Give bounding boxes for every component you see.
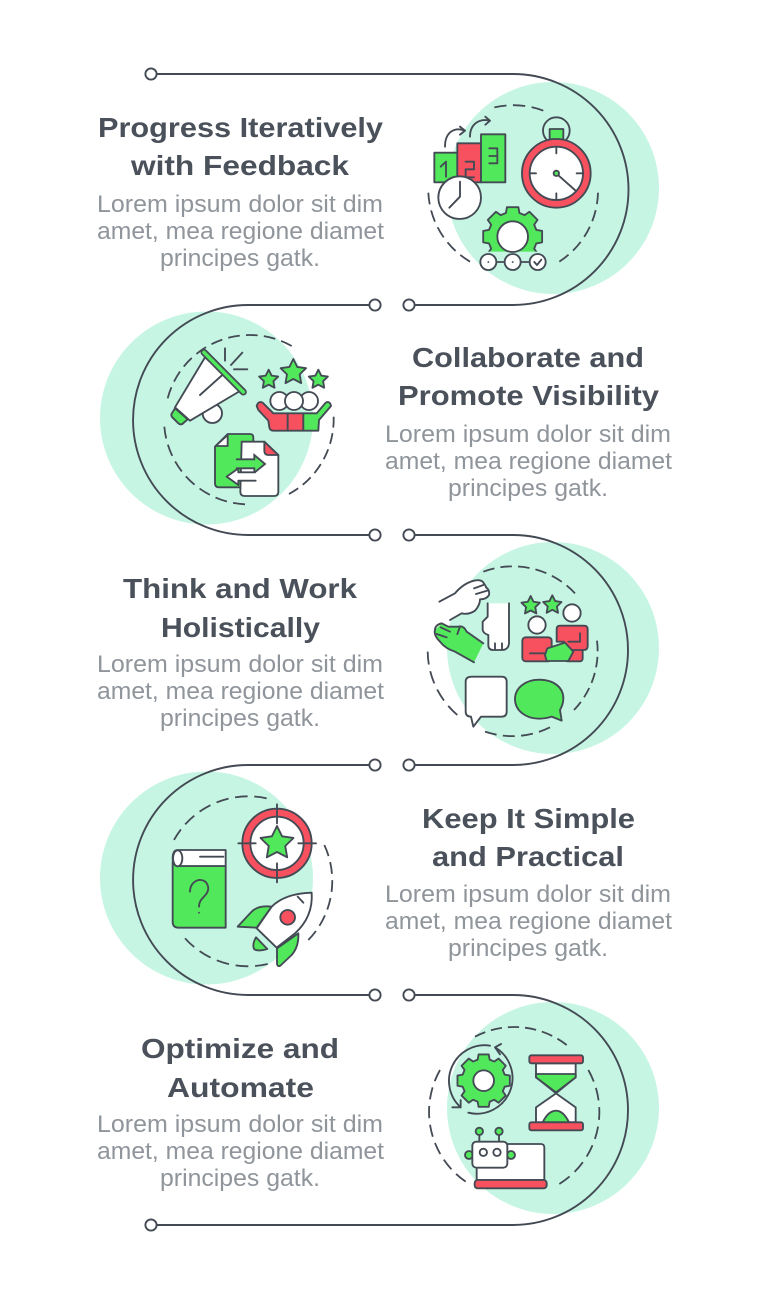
mint circle 3	[447, 542, 659, 754]
icon: megaphone	[171, 348, 247, 424]
heading 4: Keep It Simple	[422, 803, 635, 834]
panel: optimize and automate	[97, 989, 659, 1231]
icons 5	[429, 1027, 599, 1188]
mint circle 4	[100, 772, 313, 984]
body text 3	[97, 651, 384, 732]
body text 5: principes gatk.	[160, 1165, 320, 1192]
heading 3	[123, 573, 357, 643]
icon: document exchange	[215, 434, 278, 496]
mint circle 2	[100, 312, 313, 524]
heading 4	[422, 803, 635, 872]
icons 2	[164, 335, 334, 504]
body text 1	[97, 191, 384, 272]
connector 4	[133, 759, 381, 1001]
body text 3: amet, mea regione diamet	[97, 678, 384, 705]
icon: hourglass	[529, 1055, 583, 1130]
connector 2	[133, 299, 381, 541]
body text 4	[385, 881, 672, 962]
icons 4	[173, 796, 332, 966]
body text 1: principes gatk.	[160, 245, 320, 272]
icon: podium with clock	[434, 117, 505, 219]
mint circle 1	[447, 82, 659, 294]
body text 2	[385, 421, 672, 502]
connector 3	[403, 529, 628, 771]
icon: rocket	[238, 893, 312, 966]
connector 5	[145, 989, 628, 1231]
icon: joined hands	[435, 580, 509, 662]
icon: team with stars	[521, 595, 588, 661]
heading 5	[141, 1033, 339, 1103]
body text 5: amet, mea regione diamet	[97, 1138, 384, 1165]
panel: think holistically	[97, 529, 659, 771]
icons 1	[428, 105, 598, 270]
panel: progress iteratively	[97, 68, 659, 311]
body text 3: principes gatk.	[160, 705, 320, 732]
heading 2	[398, 342, 659, 411]
heading 5: Automate	[167, 1072, 314, 1103]
heading 1: Progress Iteratively	[98, 112, 383, 143]
icons 3	[428, 566, 598, 736]
body text 1: Lorem ipsum dolor sit dim	[97, 191, 383, 218]
heading 2: Promote Visibility	[398, 380, 659, 411]
heading 2: Collaborate and	[412, 342, 644, 373]
body text 1: amet, mea regione diamet	[97, 218, 384, 245]
icon: white speech bubble	[466, 677, 507, 727]
icon: green speech bubble	[515, 680, 563, 721]
icon: stopwatch	[522, 117, 591, 208]
icon: gear with cycle arrows	[449, 1044, 513, 1114]
heading 4: and Practical	[432, 841, 624, 872]
heading 5: Optimize and	[141, 1033, 339, 1064]
heading 1: with Feedback	[130, 150, 349, 181]
connector 1	[145, 68, 628, 311]
body text 2: amet, mea regione diamet	[385, 448, 672, 475]
icon: question book	[173, 850, 226, 928]
heading 3: Holistically	[161, 612, 320, 643]
mint circle 5	[447, 1002, 659, 1214]
icon: target with star	[238, 804, 316, 882]
body text 4: Lorem ipsum dolor sit dim	[385, 881, 671, 908]
body text 2: principes gatk.	[448, 475, 608, 502]
body text 4: amet, mea regione diamet	[385, 908, 672, 935]
body text 2: Lorem ipsum dolor sit dim	[385, 421, 671, 448]
body text 4: principes gatk.	[448, 935, 608, 962]
icon: robot with laptop	[465, 1128, 547, 1188]
icon: team rating	[257, 359, 331, 431]
icon: gear with steps	[480, 207, 546, 270]
body text 5: Lorem ipsum dolor sit dim	[97, 1111, 383, 1138]
heading 1	[98, 112, 383, 181]
panel: keep it simple	[100, 759, 672, 1001]
panel: collaborate	[100, 299, 672, 541]
body text 3: Lorem ipsum dolor sit dim	[97, 651, 383, 678]
body text 5	[97, 1111, 384, 1192]
heading 3: Think and Work	[123, 573, 357, 604]
